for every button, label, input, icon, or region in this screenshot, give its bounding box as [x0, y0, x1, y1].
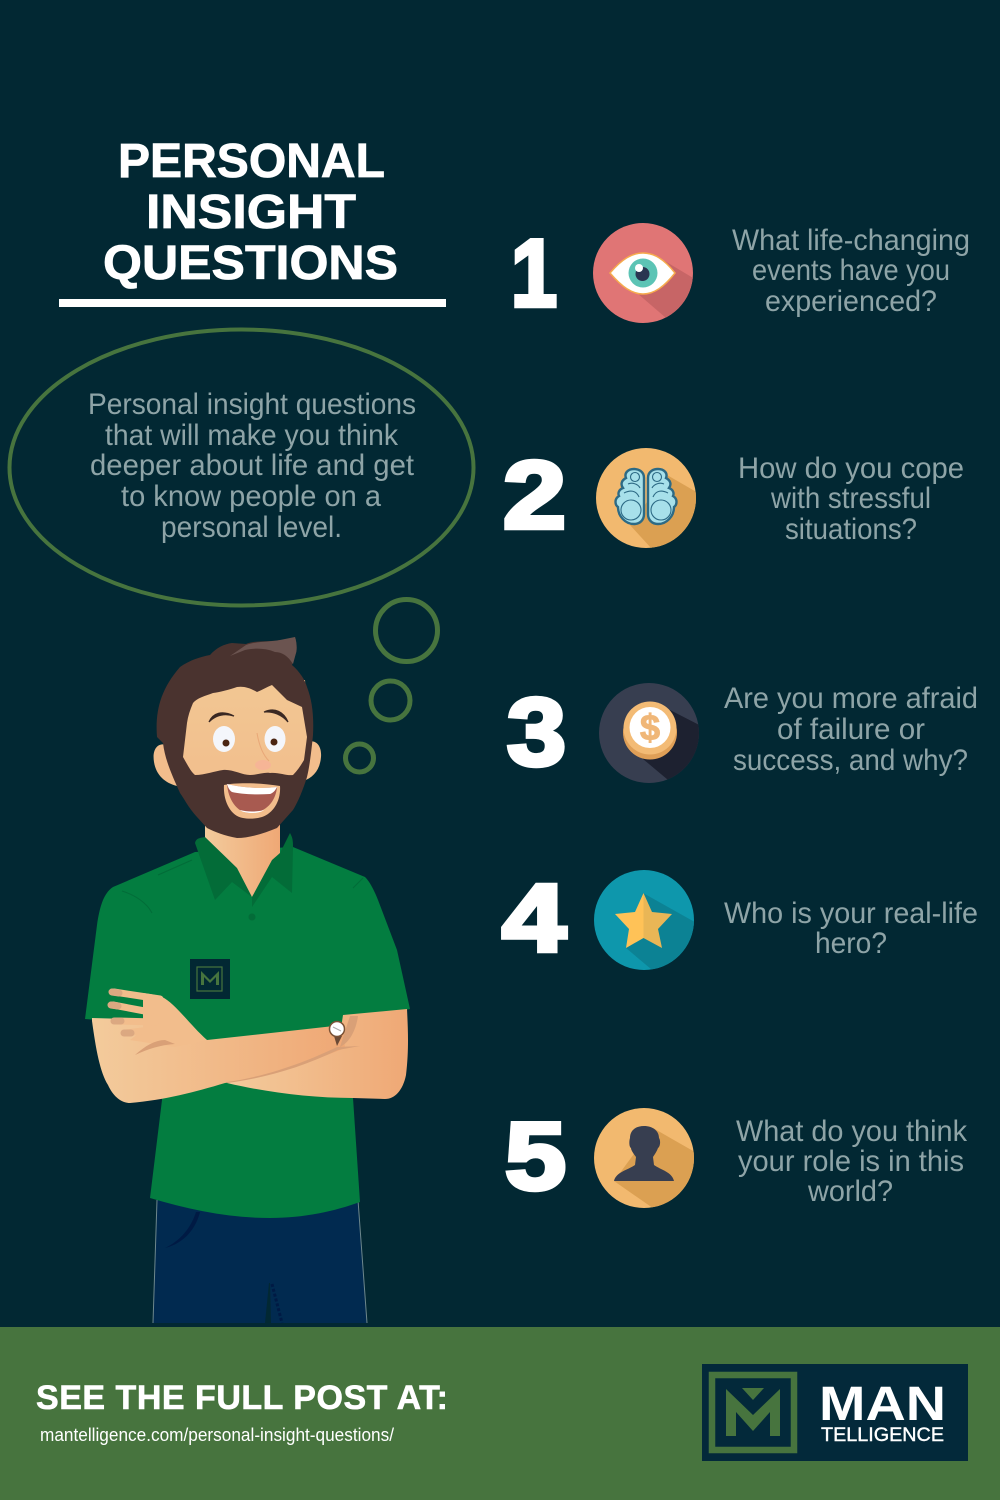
item 3: number: 3 [507, 679, 566, 786]
hand [111, 992, 207, 1047]
thought bubble with intro text [10, 330, 474, 606]
thought bubble circles [346, 600, 438, 772]
question 3: of failure or [777, 713, 925, 746]
question 1 [732, 224, 970, 318]
title [59, 135, 446, 307]
item 3: coin icon [599, 683, 699, 783]
eyes [213, 726, 286, 752]
thought bubble with intro text: to know people on a [121, 480, 381, 513]
nose [255, 733, 271, 770]
logo [702, 1364, 968, 1461]
footer url: mantelligence.com/personal-insight-questions/ [40, 1424, 395, 1445]
item 3: coin icon: $ [640, 707, 660, 748]
question 1: experienced? [765, 285, 937, 318]
skin around mouth [224, 783, 280, 819]
illustration: bearded man in green polo [85, 637, 410, 1323]
wrist watch [330, 1022, 344, 1046]
footer band [0, 1327, 1000, 1500]
item 5: person icon [594, 1108, 694, 1208]
question 5 [736, 1115, 968, 1208]
thought bubble with intro text: deeper about life and get [90, 449, 415, 482]
question 4: Who is your real-life [724, 897, 978, 930]
question 5: What do you think [736, 1115, 968, 1148]
item 5: number: 5 [505, 1103, 566, 1210]
question 4 [724, 897, 978, 960]
item 4: star icon [594, 870, 694, 970]
thought bubble with intro text: Personal insight questions [88, 388, 416, 421]
collar [195, 833, 293, 907]
question 3: Are you more afraid [724, 682, 978, 715]
question 2 [738, 452, 964, 546]
shirt creases [122, 860, 363, 913]
item 2: brain icon [596, 448, 696, 548]
question 1: What life-changing [732, 224, 970, 257]
neck [205, 822, 280, 897]
shirt placket button [248, 914, 256, 920]
mouth [227, 784, 277, 813]
shirt chest badge [190, 959, 230, 999]
item 1: number: 1 [511, 220, 557, 327]
trousers [153, 1195, 367, 1323]
question 5: world? [807, 1175, 893, 1208]
title: QUESTIONS [103, 237, 398, 290]
question 3 [724, 682, 978, 777]
eyebrows [209, 710, 288, 722]
question 2: How do you cope [738, 452, 964, 485]
question 4: hero? [815, 927, 887, 960]
item 4: number: 4 [502, 865, 566, 972]
item 2: number: 2 [503, 442, 566, 549]
face [182, 680, 310, 800]
hair and beard [157, 637, 313, 838]
left forearm (front) [92, 1018, 345, 1103]
question 3: success, and why? [733, 744, 968, 777]
question 1: events have you [752, 254, 950, 287]
item 1: eye icon [593, 223, 693, 323]
question 5: your role is in this [738, 1145, 964, 1178]
thought bubble with intro text: personal level. [161, 511, 342, 544]
title: INSIGHT [146, 186, 356, 239]
thought bubble with intro text: that will make you think [105, 419, 399, 452]
question 2: situations? [785, 513, 917, 546]
logo: MAN [819, 1378, 946, 1431]
title: PERSONAL [118, 135, 385, 188]
arm crease shadows [135, 1040, 360, 1083]
polo shirt [85, 847, 410, 1218]
question 2: with stressful [770, 482, 931, 515]
logo: TELLIGENCE [821, 1424, 944, 1446]
ears [154, 741, 321, 786]
right forearm (behind) [227, 1009, 408, 1099]
footer call to action: SEE THE FULL POST AT: [36, 1379, 448, 1417]
